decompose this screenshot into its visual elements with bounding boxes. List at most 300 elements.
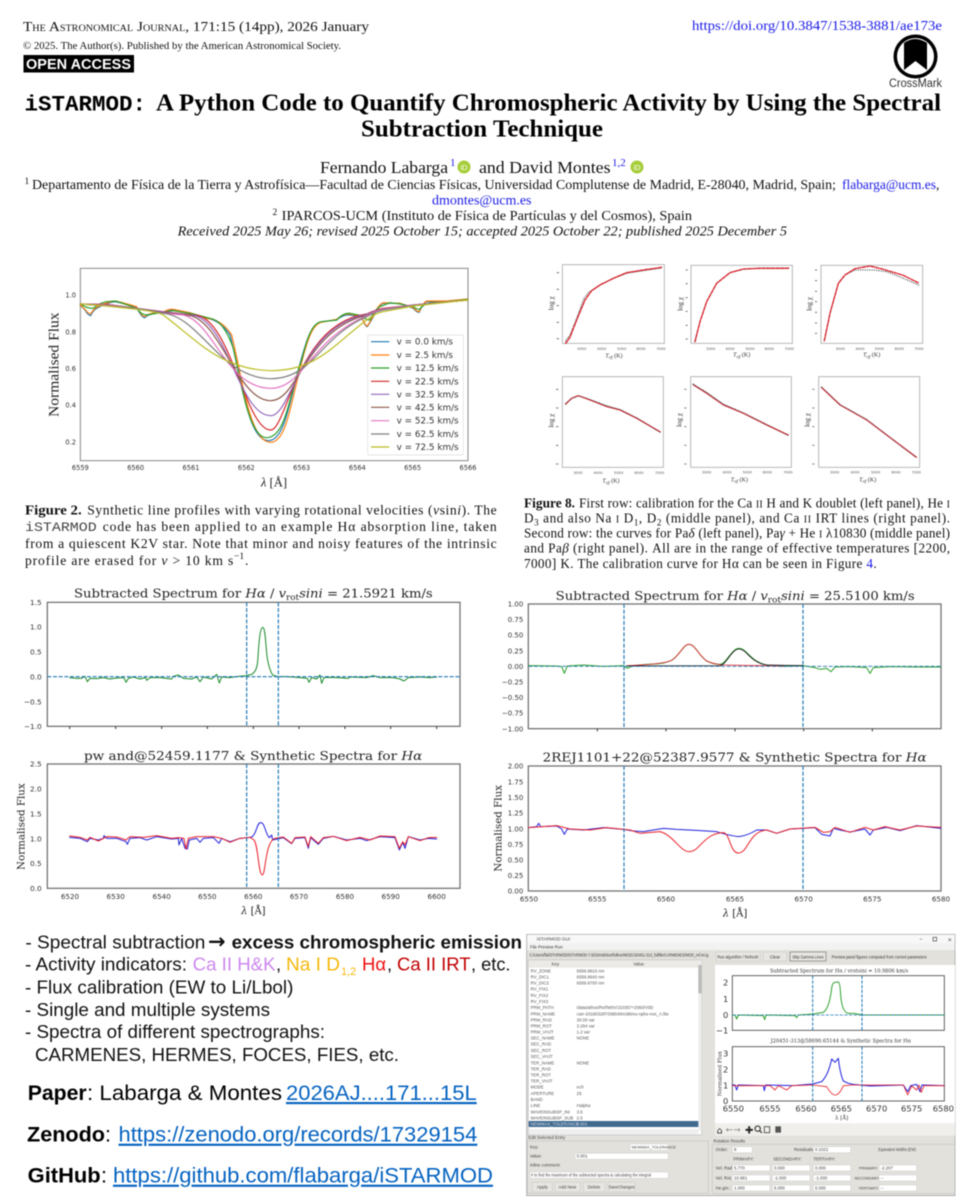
legend: v = 62.5 km/s xyxy=(397,430,459,440)
panel: He I and Na I: T xyxy=(733,353,736,359)
panel: synthetic spectra right: 1.75 xyxy=(508,778,523,786)
key value table: RV_ZONE xyxy=(531,968,551,973)
panel: synthetic spectra right xyxy=(493,751,951,919)
legend: v = 52.5 km/s xyxy=(397,417,459,427)
right spectra figure xyxy=(493,589,951,919)
figure 2: line profiles chart: 0.6 xyxy=(65,365,76,373)
figure 2: line profiles chart: 6565 xyxy=(404,464,421,472)
embedded synthetic spectra: Normalised Flux xyxy=(717,1051,723,1096)
panel: Ca II H and K: 4000 xyxy=(597,347,607,351)
key value table: 3.294 var xyxy=(577,1024,595,1029)
panel: synthetic spectra left: 6520 xyxy=(61,892,80,901)
panel: synthetic spectra right: 0.00 xyxy=(508,888,523,896)
legend: v = 0.0 km/s xyxy=(397,338,453,348)
key value table: SEC_VHJT xyxy=(531,1054,553,1059)
panel: Pa gamma and He I: 5000 xyxy=(743,470,753,474)
zenodo link: : xyxy=(105,1123,111,1147)
toolbar buttons xyxy=(716,952,927,961)
key value table: TER_VHJT xyxy=(531,1078,553,1083)
panel: subtracted spectrum left: = 21.5921 km/s xyxy=(327,587,423,601)
edit selected entry form: Add New xyxy=(559,1185,577,1190)
file path: C:/Users/fla/iSTARMOD/iSTARMOD-7.5/GitHub/test/fullrun/MOD/J20451-313_fullfile/CARMENES/MOD_mf.ini.ig xyxy=(529,952,709,957)
affiliations: Departamento de Física de la Tierra y Astrofísica—Facultad de Ciencias Físicas, Universidad Complutense de Madrid, E-28040, Madrid, Spain; xyxy=(32,177,836,192)
figure 2 caption: iSTARMOD xyxy=(25,520,97,535)
key value table: PRM_RAD xyxy=(531,1018,552,1023)
rotation results form: 0.000 xyxy=(774,1166,785,1171)
panel: synthetic spectra right: 6570 xyxy=(795,895,813,904)
panel: synthetic spectra right: 6580 xyxy=(932,895,951,904)
rotation results form: SECONDARY: xyxy=(773,1156,802,1161)
panel: Pa delta: (K) xyxy=(610,478,620,485)
affiliations: dmontes@ucm.es xyxy=(432,192,532,207)
icon: crossmark xyxy=(889,34,942,90)
key value table: RV_FIX1 xyxy=(531,987,549,992)
key value table: 6559.8640 nm xyxy=(577,974,605,979)
panel: Pa delta: eff xyxy=(606,480,611,485)
embedded subtracted spectrum: −1 xyxy=(716,1025,728,1035)
feature bullet list: Na I D xyxy=(286,954,340,975)
plot navigation toolbar: → xyxy=(733,1126,741,1136)
feature bullet list: - Spectra of different spectrographs: xyxy=(25,1021,325,1042)
paper link: Paper xyxy=(28,1081,87,1105)
edit selected entry form: NEWMAX_TOLERANCE xyxy=(632,1145,676,1150)
panel: subtracted spectrum left: 1.0 xyxy=(30,623,42,632)
edit selected entry form: Inline comment: xyxy=(530,1163,561,1168)
panel: Ca II H and K: 6000 xyxy=(636,347,646,351)
rotation results form: 8 xyxy=(734,1147,737,1152)
key value table: PRM_VHJT xyxy=(531,1030,554,1035)
panel: synthetic spectra right: 0.75 xyxy=(508,841,523,849)
rotation results form: -2.207 xyxy=(881,1166,894,1171)
panel: subtracted spectrum right: −0.50 xyxy=(502,694,523,702)
figure 8 caption: 7000] K. The calibration curve for Hα can be seen in Figure 4. xyxy=(524,556,877,571)
panel: synthetic spectra left: 6530 xyxy=(107,892,125,901)
panel: synthetic spectra left: 6550 xyxy=(198,892,217,901)
key value table: NONE xyxy=(577,1060,589,1065)
rotation results form: TERTIARY: xyxy=(813,1156,836,1161)
panel: Pa gamma and He I: 6000 xyxy=(763,470,773,474)
figure 2: line profiles chart: 1.0 xyxy=(65,292,76,300)
authors: Fernando Labarga xyxy=(320,158,448,177)
authors: 1 xyxy=(450,157,456,169)
embedded subtracted spectrum: 2 xyxy=(723,978,728,988)
feature bullet list: Hα xyxy=(362,954,386,975)
panel: Ca II IRT: T xyxy=(863,353,866,359)
panel: subtracted spectrum right: −1.00 xyxy=(502,725,523,733)
panel: He I and Na I: 5000 xyxy=(745,347,755,351)
authors: and David Montes xyxy=(479,158,610,177)
feature bullet list: - Flux calibration (EW to Li/Lbol) xyxy=(25,976,293,997)
title bar: File Preview Run xyxy=(530,944,563,949)
embedded synthetic spectra: 6550 xyxy=(723,1104,744,1114)
figure 8 caption: 3 xyxy=(534,517,539,527)
edit selected entry form: 0.001 xyxy=(577,1154,588,1159)
plot navigation toolbar: ← xyxy=(726,1126,733,1136)
key value table: WAVEINSUBSP_SUB xyxy=(531,1116,573,1121)
rotation results form: Vel. Rot.: xyxy=(716,1176,733,1181)
panel: synthetic spectra right: 6550 xyxy=(520,895,539,904)
panel: synthetic spectra left: 6560 xyxy=(244,892,263,901)
key value table: RV_FIX2 xyxy=(531,993,549,998)
paper link: 2026AJ....171...15L xyxy=(286,1081,477,1105)
figure 2: line profiles chart: 6564 xyxy=(349,464,366,472)
embedded synthetic spectra xyxy=(717,1038,954,1122)
panel: subtracted spectrum right: 0.25 xyxy=(508,647,523,655)
open access badge: OPEN ACCESS xyxy=(26,57,131,73)
figure 2 caption: Figure 2. xyxy=(25,502,82,517)
panel: subtracted spectrum right: −0.75 xyxy=(502,710,523,718)
window frame xyxy=(527,934,955,1196)
rotation results form: TERTIARY: xyxy=(858,1186,879,1191)
key value table: 3.5 xyxy=(577,1109,583,1114)
edit selected entry form xyxy=(527,1135,708,1193)
key value table: Halpha xyxy=(577,1103,591,1108)
panel: Pa beta: T xyxy=(859,477,862,483)
figure 8 caption: 1 xyxy=(634,517,638,527)
figure 8 caption: 2 xyxy=(657,517,661,527)
panel: Pa beta: 6000 xyxy=(891,470,901,474)
panel: Ca II IRT xyxy=(806,265,924,359)
panel: subtracted spectrum right: 0.00 xyxy=(508,663,523,671)
feature bullet list: 1,2 xyxy=(341,966,356,978)
title: A Python Code to Quantify Chromospheric Activity by Using the Spectral xyxy=(156,90,941,117)
panel: synthetic spectra right: 2REJ1101+22@52387.9577 & Synthetic Spectra for Hα xyxy=(543,751,927,765)
panel: subtracted spectrum left: 1.5 xyxy=(30,598,42,607)
embedded synthetic spectra: J20451-313@58690.65144 & Synthetic Spectra for Hα xyxy=(770,1038,911,1045)
feature bullet list: - Spectral subtraction xyxy=(25,931,205,952)
legend: v = 42.5 km/s xyxy=(397,403,459,413)
panel: Pa delta: 3000 xyxy=(573,471,583,475)
figure 2 caption: Synthetic line profiles with varying rotational velocities (vsini). The xyxy=(87,502,497,518)
plot navigation toolbar: ⌂ xyxy=(717,1125,723,1136)
panel: He I and Na I: (K) xyxy=(740,352,750,359)
panel: Pa gamma and He I: 7000 xyxy=(783,470,793,474)
panel: subtracted spectrum left: Subtracted Spectrum for Hα / v xyxy=(74,587,285,601)
panel: He I and Na I: 7000 xyxy=(785,347,795,351)
key value table: 25 xyxy=(577,1091,582,1096)
key value table: 6559.8815 nm xyxy=(577,968,605,973)
toolbar buttons: Preview panel figures computed from current parameters xyxy=(832,954,927,959)
journal header xyxy=(23,19,369,52)
legend: v = 12.5 km/s xyxy=(397,364,459,374)
figure 2: line profiles chart: 6561 xyxy=(183,464,199,472)
panel: Pa delta: 7000 xyxy=(655,471,665,475)
figure 8 caption: II IRT lines (right panel). xyxy=(804,510,950,525)
key value table: SEC_NAME xyxy=(531,1036,555,1041)
embedded synthetic spectra: 6560 xyxy=(795,1104,817,1114)
rotation results form: Equivalent Widths (EW) xyxy=(878,1147,916,1152)
paper link: : Labarga & Montes xyxy=(87,1081,282,1105)
figure 2: line profiles chart xyxy=(47,268,476,490)
feature bullet list: Ca II H&K xyxy=(193,954,276,975)
feature bullet list xyxy=(25,929,522,1065)
embedded synthetic spectra: 6555 xyxy=(759,1104,781,1114)
panel: subtracted spectrum left: −0.5 xyxy=(24,697,42,706)
figure 2 caption xyxy=(25,502,497,568)
panel: He I and Na I: 6000 xyxy=(765,347,775,351)
key value table: Key xyxy=(552,962,560,967)
key value table: 6559.8700 nm xyxy=(577,980,605,985)
edit selected entry form: Key: xyxy=(530,1144,539,1149)
figure 2: line profiles chart: 0.8 xyxy=(65,328,76,336)
copyright line: © 2025. The Author(s). Published by the American Astronomical Society. xyxy=(23,41,341,52)
zenodo link: Zenodo xyxy=(27,1123,105,1147)
panel: subtracted spectrum left: −1.0 xyxy=(24,722,42,731)
figure 8 caption: Second row: the curves for Paδ (left panel), Paγ + He I λ10830 (middle panel) xyxy=(524,525,950,540)
panel: synthetic spectra right: 6575 xyxy=(863,895,881,904)
affiliations: 1 xyxy=(24,177,30,187)
panel: subtracted spectrum left: 0.5 xyxy=(30,648,42,657)
panel: synthetic spectra right: 0.25 xyxy=(508,872,523,880)
affiliations xyxy=(24,177,939,223)
key value table: NEWMAX_TOLERANCE xyxy=(531,1122,579,1127)
publication dates: Received 2025 May 26; revised 2025 October 15; accepted 2025 October 22; published 2025 December 5 xyxy=(177,224,787,239)
panel: Ca II IRT: 7000 xyxy=(914,347,924,351)
key value table: PRM_ROT xyxy=(531,1024,552,1029)
title bar: iSTARMOD GUI xyxy=(537,937,570,942)
github link: https://github.com/flabarga/iSTARMOD xyxy=(113,1164,493,1188)
title bar: – xyxy=(919,936,922,943)
key value table: 1.2 var xyxy=(577,1030,590,1035)
panel: Ca II IRT: 4000 xyxy=(855,347,865,351)
panel: subtracted spectrum right: −0.25 xyxy=(502,679,523,687)
panel: subtracted spectrum right: 1.00 xyxy=(508,601,523,609)
y axis label: Normalised Flux xyxy=(47,312,63,417)
edit selected entry form: # to find the maximum of the subtracted spectra & calculating the integral xyxy=(531,1173,651,1178)
panel: Ca II IRT: 3000 xyxy=(836,347,846,351)
edit selected entry form: Delete xyxy=(588,1185,601,1190)
panel: He I and Na I: log χ xyxy=(677,296,685,311)
key value table: SEC_RAD xyxy=(531,1042,551,1047)
panel: Pa delta: 4000 xyxy=(593,471,603,475)
panel: Ca II H and K: 7000 xyxy=(656,347,666,351)
resource links xyxy=(27,1081,493,1188)
rotation results form: -- xyxy=(881,1186,884,1191)
embedded synthetic spectra: 6575 xyxy=(901,1104,922,1114)
panel: Pa beta: eff xyxy=(862,479,867,484)
toolbar buttons: Run algorithm / Refresh xyxy=(717,954,759,959)
figure 8 caption: Figure 8. xyxy=(524,495,575,510)
embedded plot panel xyxy=(715,965,955,1123)
key value table xyxy=(528,960,702,1135)
panel: Pa beta: 3000 xyxy=(830,470,840,474)
affiliations: IPARCOS-UCM (Instituto de Física de Partículas y del Cosmos), Spain xyxy=(282,208,692,223)
panel: synthetic spectra right: 6560 xyxy=(657,895,676,904)
panel: Ca II IRT: log χ xyxy=(806,296,814,311)
panel: synthetic spectra left: 6590 xyxy=(382,892,400,901)
panel: synthetic spectra left: 6600 xyxy=(428,892,446,901)
rotation results form: 10.981 xyxy=(734,1176,748,1181)
panel: subtracted spectrum right: sini xyxy=(781,589,805,603)
figure 8 caption: and also Na xyxy=(539,510,615,525)
panel: synthetic spectra left: 0.0 xyxy=(30,884,42,893)
rotation results form: Rotation Results xyxy=(713,1138,745,1143)
embedded subtracted spectrum: 0 xyxy=(723,1010,728,1020)
panel: Pa beta xyxy=(803,377,922,484)
toolbar buttons: Skip Gamma Lines xyxy=(792,954,824,959)
rotation results form: Order: xyxy=(716,1147,728,1152)
key value table: carr-20190328T038040m38imu-nphe-nvs_A.fits xyxy=(577,1011,669,1016)
panel: synthetic spectra right: 1.25 xyxy=(508,810,523,818)
icon: orcid 1 xyxy=(458,160,470,174)
figure 8 caption: (middle panel), and Ca xyxy=(662,510,803,525)
panel: synthetic spectra right: 6555 xyxy=(588,895,606,904)
panel: subtracted spectrum right: 0.75 xyxy=(508,616,523,624)
panel: synthetic spectra left xyxy=(17,749,460,917)
rotation results form: 5.000 xyxy=(815,1186,826,1191)
embedded synthetic spectra: 0 xyxy=(723,1096,728,1106)
key value table: TER_NAME xyxy=(531,1060,554,1065)
figure 8 caption: and Paβ (right panel). All are in the range of effective temperatures [2200, xyxy=(524,541,950,556)
panel: Pa gamma and He I: log χ xyxy=(676,412,684,427)
key value table: SEC_ROT xyxy=(531,1048,551,1053)
feature bullet list: - Activity indicators: xyxy=(25,954,187,975)
key value table: Value xyxy=(633,962,645,967)
panel: synthetic spectra left: 0.5 xyxy=(30,859,42,868)
key value table: LINE xyxy=(531,1103,540,1108)
key value table: TER_RAD xyxy=(531,1066,551,1071)
panel: subtracted spectrum left: rot xyxy=(286,593,300,602)
embedded subtracted spectrum xyxy=(716,968,944,1035)
panel: synthetic spectra left: 2.0 xyxy=(30,784,42,793)
figure 2: line profiles chart: 0.2 xyxy=(65,438,76,446)
title xyxy=(24,90,941,143)
figure 2: line profiles chart: 6566 xyxy=(460,464,476,472)
journal citation: The Astronomical Journal , 171:15 (14pp), 2026 January xyxy=(23,19,369,34)
authors: 1,2 xyxy=(612,157,626,169)
panel: Ca II IRT: eff xyxy=(866,354,871,359)
panel: Pa beta: (K) xyxy=(866,476,876,483)
figure 2: line profiles chart: 6560 xyxy=(127,464,144,472)
feature bullet list: , xyxy=(276,954,281,975)
rotation results form: SECONDARY: xyxy=(854,1176,880,1181)
figure 8 caption xyxy=(524,495,950,571)
panel: subtracted spectrum right: = 25.5100 km/s xyxy=(809,589,907,603)
figure 8 caption: I D xyxy=(616,510,633,525)
panel: Pa beta: log χ xyxy=(803,412,811,427)
panel: He I and Na I: 3000 xyxy=(706,347,716,351)
application screenshot xyxy=(527,934,955,1196)
paper link xyxy=(28,1081,477,1105)
figure 2 caption: −1 xyxy=(234,552,244,562)
figure 2 caption: . xyxy=(245,553,248,568)
github link: GitHub xyxy=(28,1164,101,1188)
panel: subtracted spectrum left: 0.0 xyxy=(30,672,42,681)
panel: subtracted spectrum right: Subtracted Spectrum for Hα / v xyxy=(556,589,767,603)
rotation results form: -- xyxy=(881,1176,884,1181)
embedded synthetic spectra: 2 xyxy=(723,1065,728,1075)
plot navigation toolbar: ✚ xyxy=(745,1126,753,1137)
panel: subtracted spectrum left: sini xyxy=(299,587,323,601)
panel: subtracted spectrum right: rot xyxy=(768,594,782,604)
panel: Pa delta: 6000 xyxy=(634,471,644,475)
panel: Pa delta: log χ xyxy=(547,413,555,428)
authors xyxy=(320,157,644,177)
key value table: 0.001 xyxy=(577,1122,588,1127)
feature bullet list: Ca II IRT xyxy=(397,954,471,975)
panel: synthetic spectra left: 1.5 xyxy=(30,809,42,818)
key value table: 30.00 var xyxy=(577,1018,595,1023)
panel: subtracted spectrum right xyxy=(502,589,941,733)
feature bullet list: excess chromospheric emission xyxy=(232,931,522,952)
panel: Pa gamma and He I: eff xyxy=(734,479,739,484)
panel: Pa gamma and He I: (K) xyxy=(738,476,748,483)
panel: synthetic spectra right: 0.50 xyxy=(508,857,523,865)
rotation results form: -1.000 xyxy=(815,1176,828,1181)
panel: He I and Na I: 4000 xyxy=(725,347,735,351)
embedded subtracted spectrum: Subtracted Spectrum for Hα / vrotsini = 10.9806 km/s xyxy=(770,968,909,974)
legend: v = 2.5 km/s xyxy=(397,351,453,361)
panel: Pa gamma and He I: T xyxy=(731,477,734,483)
rotation results form: He.gm.: xyxy=(716,1186,731,1191)
left spectra figure xyxy=(17,587,460,917)
key value table: BAND xyxy=(531,1097,543,1102)
panel: synthetic spectra right: 2.00 xyxy=(508,763,523,771)
panel: synthetic spectra left: λ [Å] xyxy=(240,905,266,917)
embedded synthetic spectra: 6580 xyxy=(933,1104,954,1114)
key value table: APERTURE xyxy=(531,1091,554,1096)
icon: orcid 1: iD xyxy=(460,163,468,172)
affiliations: , xyxy=(936,177,939,192)
figure 8 caption: First row: calibration for the Ca II H and K doublet (left panel), He I xyxy=(579,495,950,510)
rotation results form: 0.1022 xyxy=(815,1147,829,1152)
feature bullet list: - Single and multiple systems xyxy=(25,999,270,1020)
panel: synthetic spectra right: λ [Å] xyxy=(722,907,747,919)
key value table: MODE xyxy=(531,1085,544,1090)
panel: Ca II H and K: eff xyxy=(609,355,614,360)
figure 2: line profiles chart: 0.4 xyxy=(65,402,76,410)
panel: synthetic spectra left: 1.0 xyxy=(30,834,42,843)
rotation results form: 1.000 xyxy=(734,1186,745,1191)
panel: subtracted spectrum right: 0.50 xyxy=(508,632,523,640)
panel: Ca II H and K: 5000 xyxy=(617,347,627,351)
feature bullet list: → xyxy=(208,929,226,953)
figure 2 caption: code has been applied to an example Hα absorption line, taken xyxy=(103,519,497,534)
figure 2: line profiles chart: 6562 xyxy=(238,464,255,472)
key value table: RV_DIC1 xyxy=(531,974,549,979)
panel: synthetic spectra left: 6540 xyxy=(153,892,171,901)
affiliations: flabarga@ucm.es xyxy=(842,177,936,192)
panel: subtracted spectrum left xyxy=(24,587,460,731)
embedded synthetic spectra: 6565 xyxy=(831,1104,852,1114)
embedded subtracted spectrum: 1 xyxy=(723,994,728,1004)
panel: synthetic spectra left: 6580 xyxy=(336,892,355,901)
panel: synthetic spectra right: 6565 xyxy=(726,895,744,904)
panel: synthetic spectra left: 6570 xyxy=(290,892,309,901)
panel: Pa beta: 5000 xyxy=(871,470,881,474)
panel: Pa gamma and He I xyxy=(676,377,793,484)
key value table: /data/athos/Ref/M0V/J10357+2060/V0D xyxy=(577,1005,653,1010)
panel: Pa beta: 4000 xyxy=(850,470,860,474)
key value table: NONE xyxy=(577,1036,589,1041)
embedded synthetic spectra: 3 xyxy=(723,1049,728,1059)
panel: synthetic spectra right: Normalised Flux xyxy=(493,785,504,872)
panel: synthetic spectra left: pw and@52459.1177 & Synthetic Spectra for Hα xyxy=(84,749,422,763)
key value table: 2.5 xyxy=(577,1116,583,1121)
panel: Ca II IRT: (K) xyxy=(870,352,880,359)
key value table: TER_ROT xyxy=(531,1072,551,1077)
rotation results form: 0.000 xyxy=(815,1166,826,1171)
rotation results form xyxy=(712,1138,955,1194)
rotation results form: 5.770 xyxy=(734,1166,745,1171)
rotation results form: PRIMARY: xyxy=(859,1166,878,1171)
feature bullet list: CARMENES, HERMES, FOCES, FIES, etc. xyxy=(35,1044,399,1065)
panel: He I and Na I: eff xyxy=(736,354,741,359)
feature bullet list: , etc. xyxy=(471,954,510,975)
velocity curves xyxy=(80,299,468,442)
title bar xyxy=(527,935,955,950)
embedded synthetic spectra: λ [Å] xyxy=(835,1114,848,1122)
